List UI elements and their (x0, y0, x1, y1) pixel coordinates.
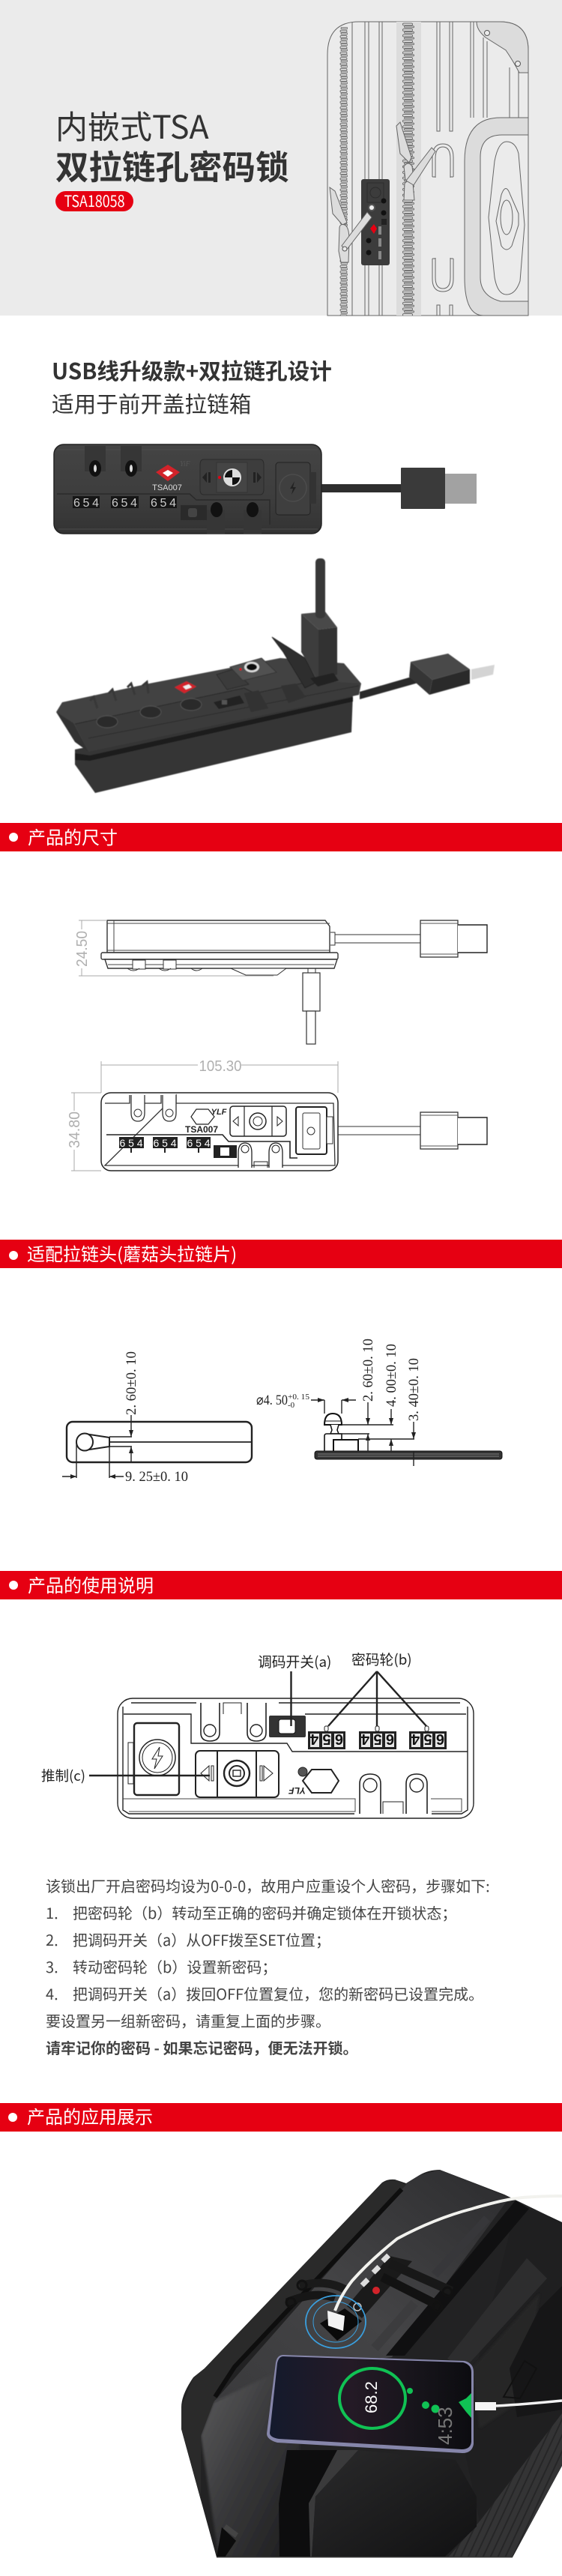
instructions text block: 把密码轮（b）转动至正确的密码并确定锁体在开锁状态； (73, 1901, 456, 1923)
zipper pull drawing: side view (256, 1339, 502, 1466)
side ribs (448, 2413, 562, 2557)
dimension drawing: plan view: 105.30 (199, 1058, 241, 1075)
zipper pull drawing: top view: 2. 60±0. 10 (124, 1351, 139, 1415)
usage diagram: lock with labelled parts (41, 1649, 474, 1818)
highlight rings (306, 2296, 366, 2348)
hero title (55, 102, 289, 189)
hero title: 双拉链孔密码锁 (55, 140, 289, 189)
zipper pull drawing: side view: 4. 00±0. 10 (384, 1344, 399, 1407)
top plate (214, 2170, 510, 2402)
heading: USB upgrade: 适用于前开盖拉链箱 (52, 387, 251, 419)
usage diagram: lock with labelled parts: YLF (288, 1785, 306, 1796)
straps (300, 2283, 347, 2290)
instructions text block: 2. (46, 1928, 58, 1950)
dimension drawing: side view: 24.50 (74, 931, 91, 967)
instructions text block: 3. (46, 1955, 58, 1977)
instructions text block: 4. (46, 1982, 58, 2004)
usage diagram: lock with labelled parts: 654 (411, 1731, 444, 1747)
application photo: suitcase with phone charging: 68.2 (362, 2381, 381, 2413)
instructions text block: 把调码开关（a）拨回OFF位置复位，您的新密码已设置完成。 (73, 1982, 483, 2004)
zipper pull drawing: side view: ⌀4. 50 (256, 1393, 288, 1408)
dimension drawing: plan view: 34.80 (67, 1111, 83, 1148)
section header: product size: 产品的尺寸 (28, 823, 118, 849)
plate ribs (435, 2218, 487, 2275)
section header: application display (0, 2102, 562, 2132)
zipper pull drawing: side view: 3. 40±0. 10 (406, 1358, 422, 1421)
usage diagram: lock with labelled parts: 654 (309, 1731, 343, 1747)
dimension drawing: plan view (67, 1058, 487, 1171)
phone (267, 2355, 474, 2453)
model badge: TSA18058 (64, 190, 124, 212)
hero illustration: suitcase line drawing with lock (327, 22, 528, 316)
right of zipper panel (549, 2215, 562, 2222)
heading: USB upgrade (52, 354, 332, 419)
section header: product size (0, 823, 562, 851)
USB plug and cable (327, 2311, 345, 2331)
section header: usage instructions: 产品的使用说明 (28, 1571, 154, 1597)
section header: compatible zipper pull (0, 1240, 562, 1268)
usage diagram: lock with labelled parts: 推制(c) (41, 1766, 85, 1785)
usage diagram: lock with labelled parts: 654 (360, 1731, 394, 1747)
dimension drawing: plan view: 654 (153, 1137, 177, 1149)
lock on suitcase (347, 2256, 412, 2318)
zipper pull drawing: side view: +0. 15 (288, 1393, 309, 1402)
lower right block (315, 2485, 477, 2557)
zipper pull drawing: side view: -0 (288, 1401, 295, 1410)
hero title: 内嵌式TSA (55, 102, 209, 148)
section header: application display: 产品的应用展示 (27, 2102, 153, 2129)
zipper pull drawing: top view (62, 1351, 252, 1485)
instructions text block (46, 1874, 490, 2058)
product photo: lock perspective view (56, 558, 495, 793)
instructions text block: 该锁出厂开启密码均设为0-0-0，故用户应重设个人密码，步骤如下: (46, 1874, 490, 1896)
zipper pull drawing: top view: 9. 25±0. 10 (125, 1469, 188, 1485)
product photo: lock front view with USB cable: 654 (151, 497, 176, 510)
dimension drawing: plan view: 654 (187, 1137, 211, 1149)
section header: usage instructions (0, 1571, 562, 1599)
product photo: lock front view with USB cable: YiF (180, 460, 191, 468)
usage diagram: lock with labelled parts: 密码轮(b) (351, 1649, 412, 1669)
instructions text block: 要设置另一组新密码，请重复上面的步骤。 (46, 2009, 330, 2031)
dimension drawing: plan view: TSA007 (185, 1124, 218, 1135)
dimension drawing: plan view: YLF (211, 1108, 227, 1117)
section header: compatible zipper pull: 适配拉链头(蘑菇头拉链片) (27, 1240, 237, 1266)
product photo: lock front view with USB cable (54, 444, 477, 534)
zipper pull drawing: side view: 2. 60±0. 10 (360, 1339, 376, 1402)
instructions text block: 转动密码轮（b）设置新密码； (73, 1955, 277, 1977)
dimension drawing: plan view: 654 (120, 1137, 143, 1149)
application photo: suitcase with phone charging (172, 2166, 562, 2563)
instructions text block: 请牢记你的密码 - 如果忘记密码，便无法开锁。 (46, 2036, 357, 2058)
product photo: lock front view with USB cable: 654 (112, 497, 137, 510)
product photo: lock front view with USB cable: TSA007 (152, 483, 182, 492)
left fabric band (181, 2180, 406, 2503)
lower front corner (201, 2361, 300, 2557)
product photo: lock front view with USB cable: 654 (73, 497, 99, 510)
instructions text block: 把调码开关（a）从OFF拨至SET位置； (73, 1928, 330, 1950)
hero background panel (0, 0, 562, 316)
second zipper band (386, 2201, 529, 2356)
usage diagram: lock with labelled parts: 调码开关(a) (258, 1651, 331, 1671)
application photo: suitcase with phone charging: 4:53 (434, 2407, 456, 2445)
lower zipper (279, 2450, 337, 2557)
USB port (320, 2308, 362, 2341)
heading: USB upgrade: USB线升级款+双拉链孔设计 (52, 354, 332, 386)
instructions text block: 1. (46, 1901, 58, 1923)
dimension drawing: side view (74, 920, 487, 1044)
